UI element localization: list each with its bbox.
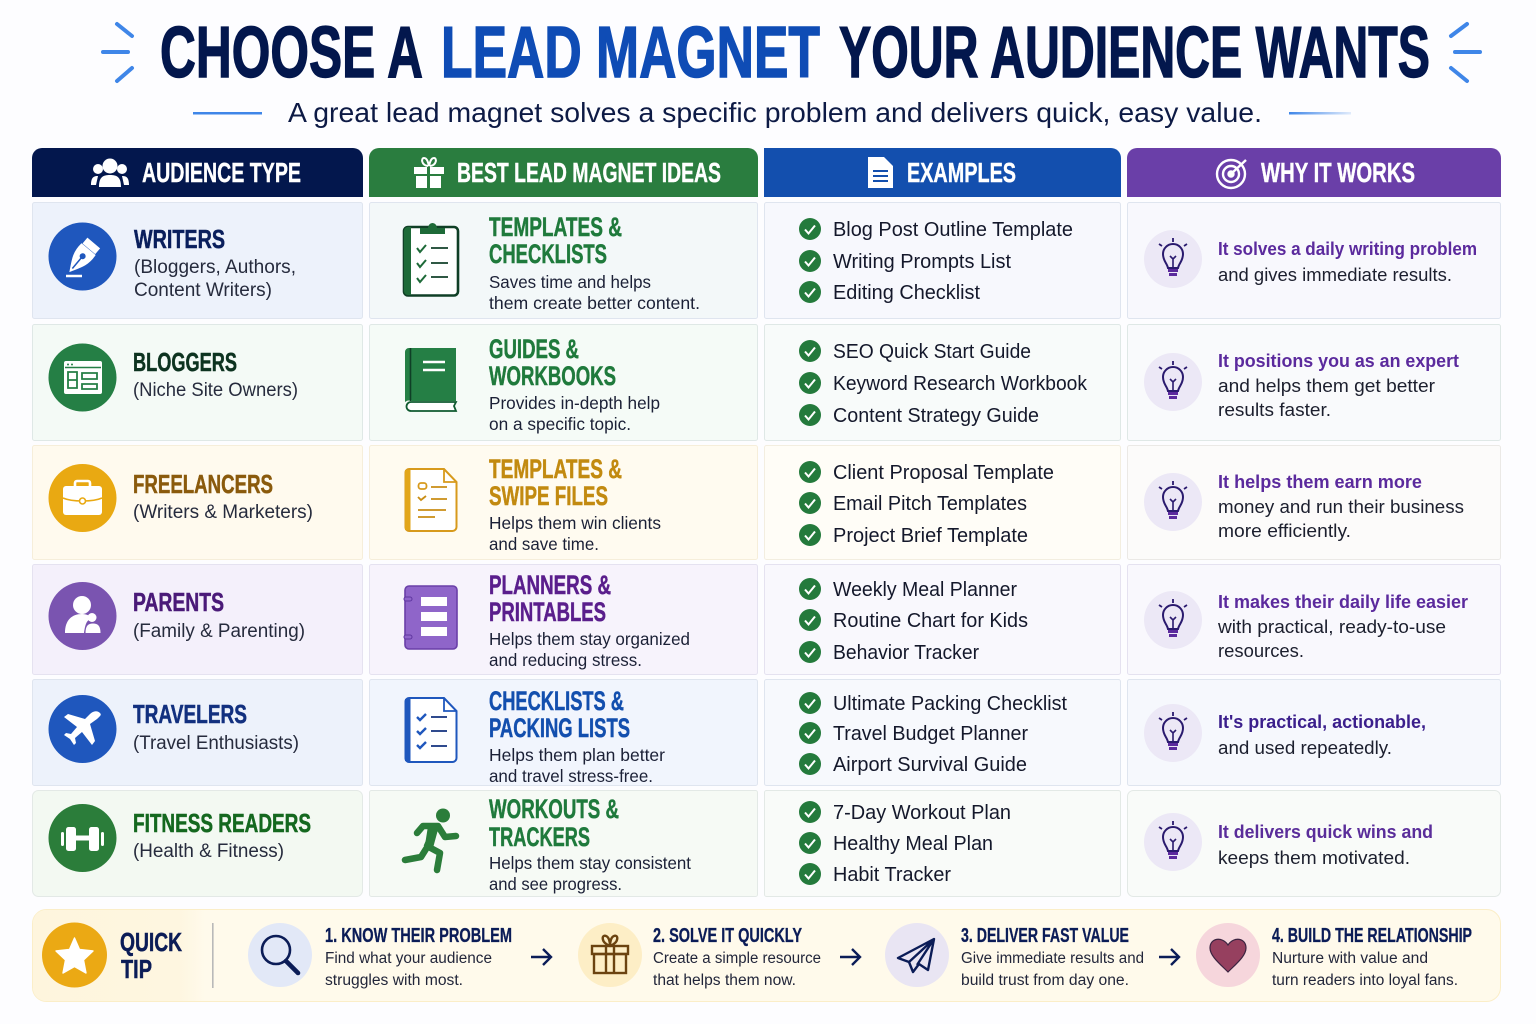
- panel: why freelancers: [1128, 446, 1500, 560]
- header: best lead magnet ideas: BEST LEAD MAGNET IDEAS: [457, 157, 721, 188]
- icon: planner: [404, 586, 457, 649]
- panel: idea guides and workbooks: on a specific topic.: [489, 414, 631, 434]
- panel: idea templates and checklists: them create better content.: [489, 293, 700, 313]
- header: why it works: WHY IT WORKS: [1261, 157, 1415, 188]
- panel: audience fitness readers: FITNESS READERS: [133, 808, 311, 838]
- panel: examples freelancers: Project Brief Template: [833, 525, 1028, 547]
- panel: examples fitness: Habit Tracker: [833, 864, 951, 886]
- panel: why fitness: [1128, 790, 1500, 896]
- panel: why writers: It solves a daily writing problem: [1218, 238, 1477, 259]
- header: best lead magnet ideas: [369, 148, 758, 197]
- panel: idea checklists and packing lists: Helps them plan better: [489, 745, 665, 765]
- icon: parent and child: [48, 582, 116, 650]
- panel: idea guides and workbooks: GUIDES &: [489, 334, 579, 364]
- row 2: bloggers: [32, 324, 1500, 440]
- panel: audience fitness readers: (Health & Fitness): [133, 841, 284, 862]
- icon: checklist document: [405, 698, 456, 762]
- icon: dumbbell: [48, 804, 116, 872]
- row 3: freelancers: [32, 446, 1500, 560]
- panel: examples parents: Routine Chart for Kids: [833, 610, 1028, 632]
- panel: audience travelers: [32, 680, 362, 786]
- panel: examples fitness: 7-Day Workout Plan: [833, 802, 1011, 824]
- icon: people: [91, 158, 129, 187]
- heading: quick tip: QUICK: [120, 927, 182, 957]
- header: why it works: [1127, 148, 1501, 197]
- step 2: solve it quickly: [578, 923, 821, 989]
- panel: idea workouts and trackers: WORKOUTS &: [489, 794, 619, 824]
- panel: examples bloggers: Keyword Research Workbook: [833, 373, 1088, 395]
- icon: star badge: [42, 922, 107, 988]
- panel: audience writers: (Bloggers, Authors,: [134, 257, 296, 278]
- icon: runner: [405, 808, 456, 870]
- title: CHOOSE A: [160, 13, 423, 93]
- header: audience type: [32, 148, 363, 197]
- panel: why freelancers: It helps them earn more: [1218, 471, 1422, 492]
- icon: clipboard: [404, 223, 458, 296]
- step 2: solve it quickly: that helps them now.: [653, 972, 796, 989]
- panel: examples writers: Writing Prompts List: [833, 251, 1011, 273]
- title: LEAD MAGNET: [441, 13, 820, 93]
- header: examples: EXAMPLES: [907, 157, 1016, 188]
- panel: idea templates and checklists: Saves time and helps: [489, 272, 651, 292]
- panel: why bloggers: results faster.: [1218, 399, 1331, 420]
- panel: audience bloggers: [32, 324, 362, 440]
- row 6: fitness readers: [32, 790, 1500, 896]
- icon: right title sparks: [1451, 24, 1480, 81]
- heading: quick tip: [120, 927, 182, 984]
- arrow 1: [531, 949, 551, 965]
- icon: gift: [414, 158, 444, 188]
- panel: idea guides and workbooks: [370, 324, 758, 440]
- panel: idea workouts and trackers: [370, 790, 758, 896]
- panel: idea planners and printables: [370, 564, 758, 674]
- step 2: solve it quickly: Create a simple resource: [653, 950, 821, 967]
- icon: briefcase: [48, 464, 116, 532]
- panel: examples freelancers: [764, 446, 1120, 560]
- panel: why parents: It makes their daily life easier: [1218, 591, 1468, 612]
- panel: idea checklists and packing lists: [370, 680, 758, 786]
- step 3: deliver fast value: Give immediate results and: [961, 950, 1144, 967]
- step 1: know their problem: struggles with most.: [325, 972, 463, 989]
- header: examples: [764, 148, 1121, 197]
- step 4: build the relationship: [1196, 923, 1472, 989]
- panel: audience writers: [32, 202, 362, 318]
- icon: browser window: [48, 344, 116, 412]
- panel: idea templates and checklists: [370, 202, 758, 318]
- panel: idea workouts and trackers: Helps them stay consistent: [489, 853, 691, 873]
- panel: examples travelers: Ultimate Packing Checklist: [833, 693, 1067, 715]
- step 4: build the relationship: Nurture with value and: [1272, 950, 1428, 967]
- panel: idea templates and swipe files: SWIPE FILES: [489, 481, 608, 511]
- panel: idea checklists and packing lists: CHECKLISTS &: [489, 686, 624, 716]
- icon: pen nib: [48, 222, 116, 290]
- row 4: parents: [32, 564, 1500, 674]
- panel: examples bloggers: [764, 324, 1120, 440]
- panel: examples freelancers: Email Pitch Templates: [833, 493, 1027, 515]
- arrow 2: [840, 949, 860, 965]
- panel: idea templates and swipe files: TEMPLATES &: [489, 454, 622, 484]
- icon: left title sparks: [103, 24, 132, 81]
- panel: why freelancers: money and run their business: [1218, 496, 1464, 517]
- panel: idea planners and printables: PRINTABLES: [489, 597, 606, 627]
- panel: idea templates and checklists: TEMPLATES &: [489, 212, 622, 242]
- panel: idea guides and workbooks: WORKBOOKS: [489, 361, 616, 391]
- panel: why writers: and gives immediate results.: [1218, 264, 1452, 285]
- panel: why travelers: and used repeatedly.: [1218, 737, 1392, 758]
- panel: examples travelers: Airport Survival Guide: [833, 754, 1027, 776]
- panel: idea checklists and packing lists: and travel stress-free.: [489, 766, 653, 786]
- step 2: solve it quickly: 2. SOLVE IT QUICKLY: [653, 925, 802, 947]
- title: [160, 13, 1430, 93]
- panel: idea workouts and trackers: and see progress.: [489, 874, 622, 894]
- panel: why parents: [1128, 564, 1500, 674]
- panel: examples bloggers: Content Strategy Guide: [833, 405, 1039, 427]
- panel: audience freelancers: (Writers & Marketers): [133, 502, 313, 523]
- panel: why parents: resources.: [1218, 640, 1304, 661]
- panel: why bloggers: and helps them get better: [1218, 375, 1435, 396]
- panel: examples fitness: [764, 790, 1120, 896]
- panel: why fitness: It delivers quick wins and: [1218, 821, 1433, 842]
- icon: airplane: [48, 695, 116, 763]
- panel: idea planners and printables: PLANNERS &: [489, 570, 611, 600]
- row 5: travelers: [32, 680, 1500, 786]
- step 1: know their problem: 1. KNOW THEIR PROBLEM: [325, 925, 512, 947]
- panel: idea templates and checklists: CHECKLISTS: [489, 239, 607, 269]
- panel: idea guides and workbooks: Provides in-depth help: [489, 393, 660, 413]
- panel: audience travelers: TRAVELERS: [133, 699, 247, 729]
- panel: examples travelers: Travel Budget Planner: [833, 723, 1028, 745]
- panel: examples parents: [764, 564, 1120, 674]
- panel: quick tip bar: [32, 910, 1500, 1002]
- step 3: deliver fast value: [885, 923, 1144, 989]
- step 1: know their problem: Find what your audience: [325, 950, 492, 967]
- panel: idea planners and printables: and reducing stress.: [489, 650, 642, 670]
- panel: examples parents: Weekly Meal Planner: [833, 579, 1017, 601]
- panel: why parents: with practical, ready-to-use: [1217, 616, 1446, 637]
- panel: audience travelers: (Travel Enthusiasts): [133, 733, 299, 754]
- panel: why bloggers: [1128, 324, 1500, 440]
- panel: audience parents: (Family & Parenting): [133, 621, 305, 642]
- panel: why travelers: It's practical, actionable,: [1218, 711, 1426, 732]
- panel: why fitness: keeps them motivated.: [1218, 847, 1410, 868]
- panel: audience bloggers: (Niche Site Owners): [133, 380, 298, 401]
- panel: audience fitness readers: [32, 790, 362, 896]
- panel: why travelers: [1128, 680, 1500, 786]
- panel: audience writers: Content Writers): [134, 280, 272, 301]
- panel: audience writers: WRITERS: [134, 224, 225, 254]
- panel: idea workouts and trackers: TRACKERS: [489, 822, 590, 852]
- panel: audience freelancers: [32, 446, 362, 560]
- panel: examples freelancers: Client Proposal Template: [833, 462, 1054, 484]
- step 3: deliver fast value: build trust from day one.: [961, 972, 1129, 989]
- panel: examples writers: Blog Post Outline Template: [833, 219, 1073, 241]
- panel: examples fitness: Healthy Meal Plan: [833, 833, 993, 855]
- panel: idea templates and swipe files: and save time.: [489, 534, 599, 554]
- panel: why writers: [1128, 202, 1500, 318]
- subtitle: A great lead magnet solves a specific problem and delivers quick, easy value.: [288, 97, 1262, 128]
- step 1: know their problem: [248, 923, 512, 989]
- panel: examples bloggers: SEO Quick Start Guide: [833, 341, 1031, 363]
- header: audience type: AUDIENCE TYPE: [142, 157, 301, 188]
- panel: examples writers: Editing Checklist: [833, 282, 980, 304]
- panel: why freelancers: more efficiently.: [1218, 520, 1351, 541]
- row 1: writers: [32, 202, 1500, 318]
- icon: book: [405, 348, 456, 411]
- panel: idea checklists and packing lists: PACKING LISTS: [489, 713, 630, 743]
- heading: quick tip: TIP: [121, 954, 152, 984]
- step 3: deliver fast value: 3. DELIVER FAST VALUE: [961, 925, 1129, 947]
- icon: document list: [405, 469, 456, 531]
- panel: idea templates and swipe files: [370, 446, 758, 560]
- panel: examples parents: Behavior Tracker: [833, 642, 979, 664]
- step 4: build the relationship: turn readers into loyal fans.: [1272, 972, 1458, 989]
- panel: why bloggers: It positions you as an expert: [1218, 350, 1459, 371]
- panel: audience parents: [32, 564, 362, 674]
- panel: audience bloggers: BLOGGERS: [133, 347, 237, 377]
- panel: audience freelancers: FREELANCERS: [133, 469, 273, 499]
- arrow 3: [1159, 949, 1179, 965]
- panel: examples travelers: [764, 680, 1120, 786]
- icon: document: [868, 157, 893, 188]
- icon: target: [1217, 160, 1246, 188]
- panel: examples writers: [764, 202, 1120, 318]
- panel: idea planners and printables: Helps them stay organized: [489, 629, 690, 649]
- panel: idea templates and swipe files: Helps them win clients: [489, 513, 661, 533]
- panel: audience parents: PARENTS: [133, 587, 224, 617]
